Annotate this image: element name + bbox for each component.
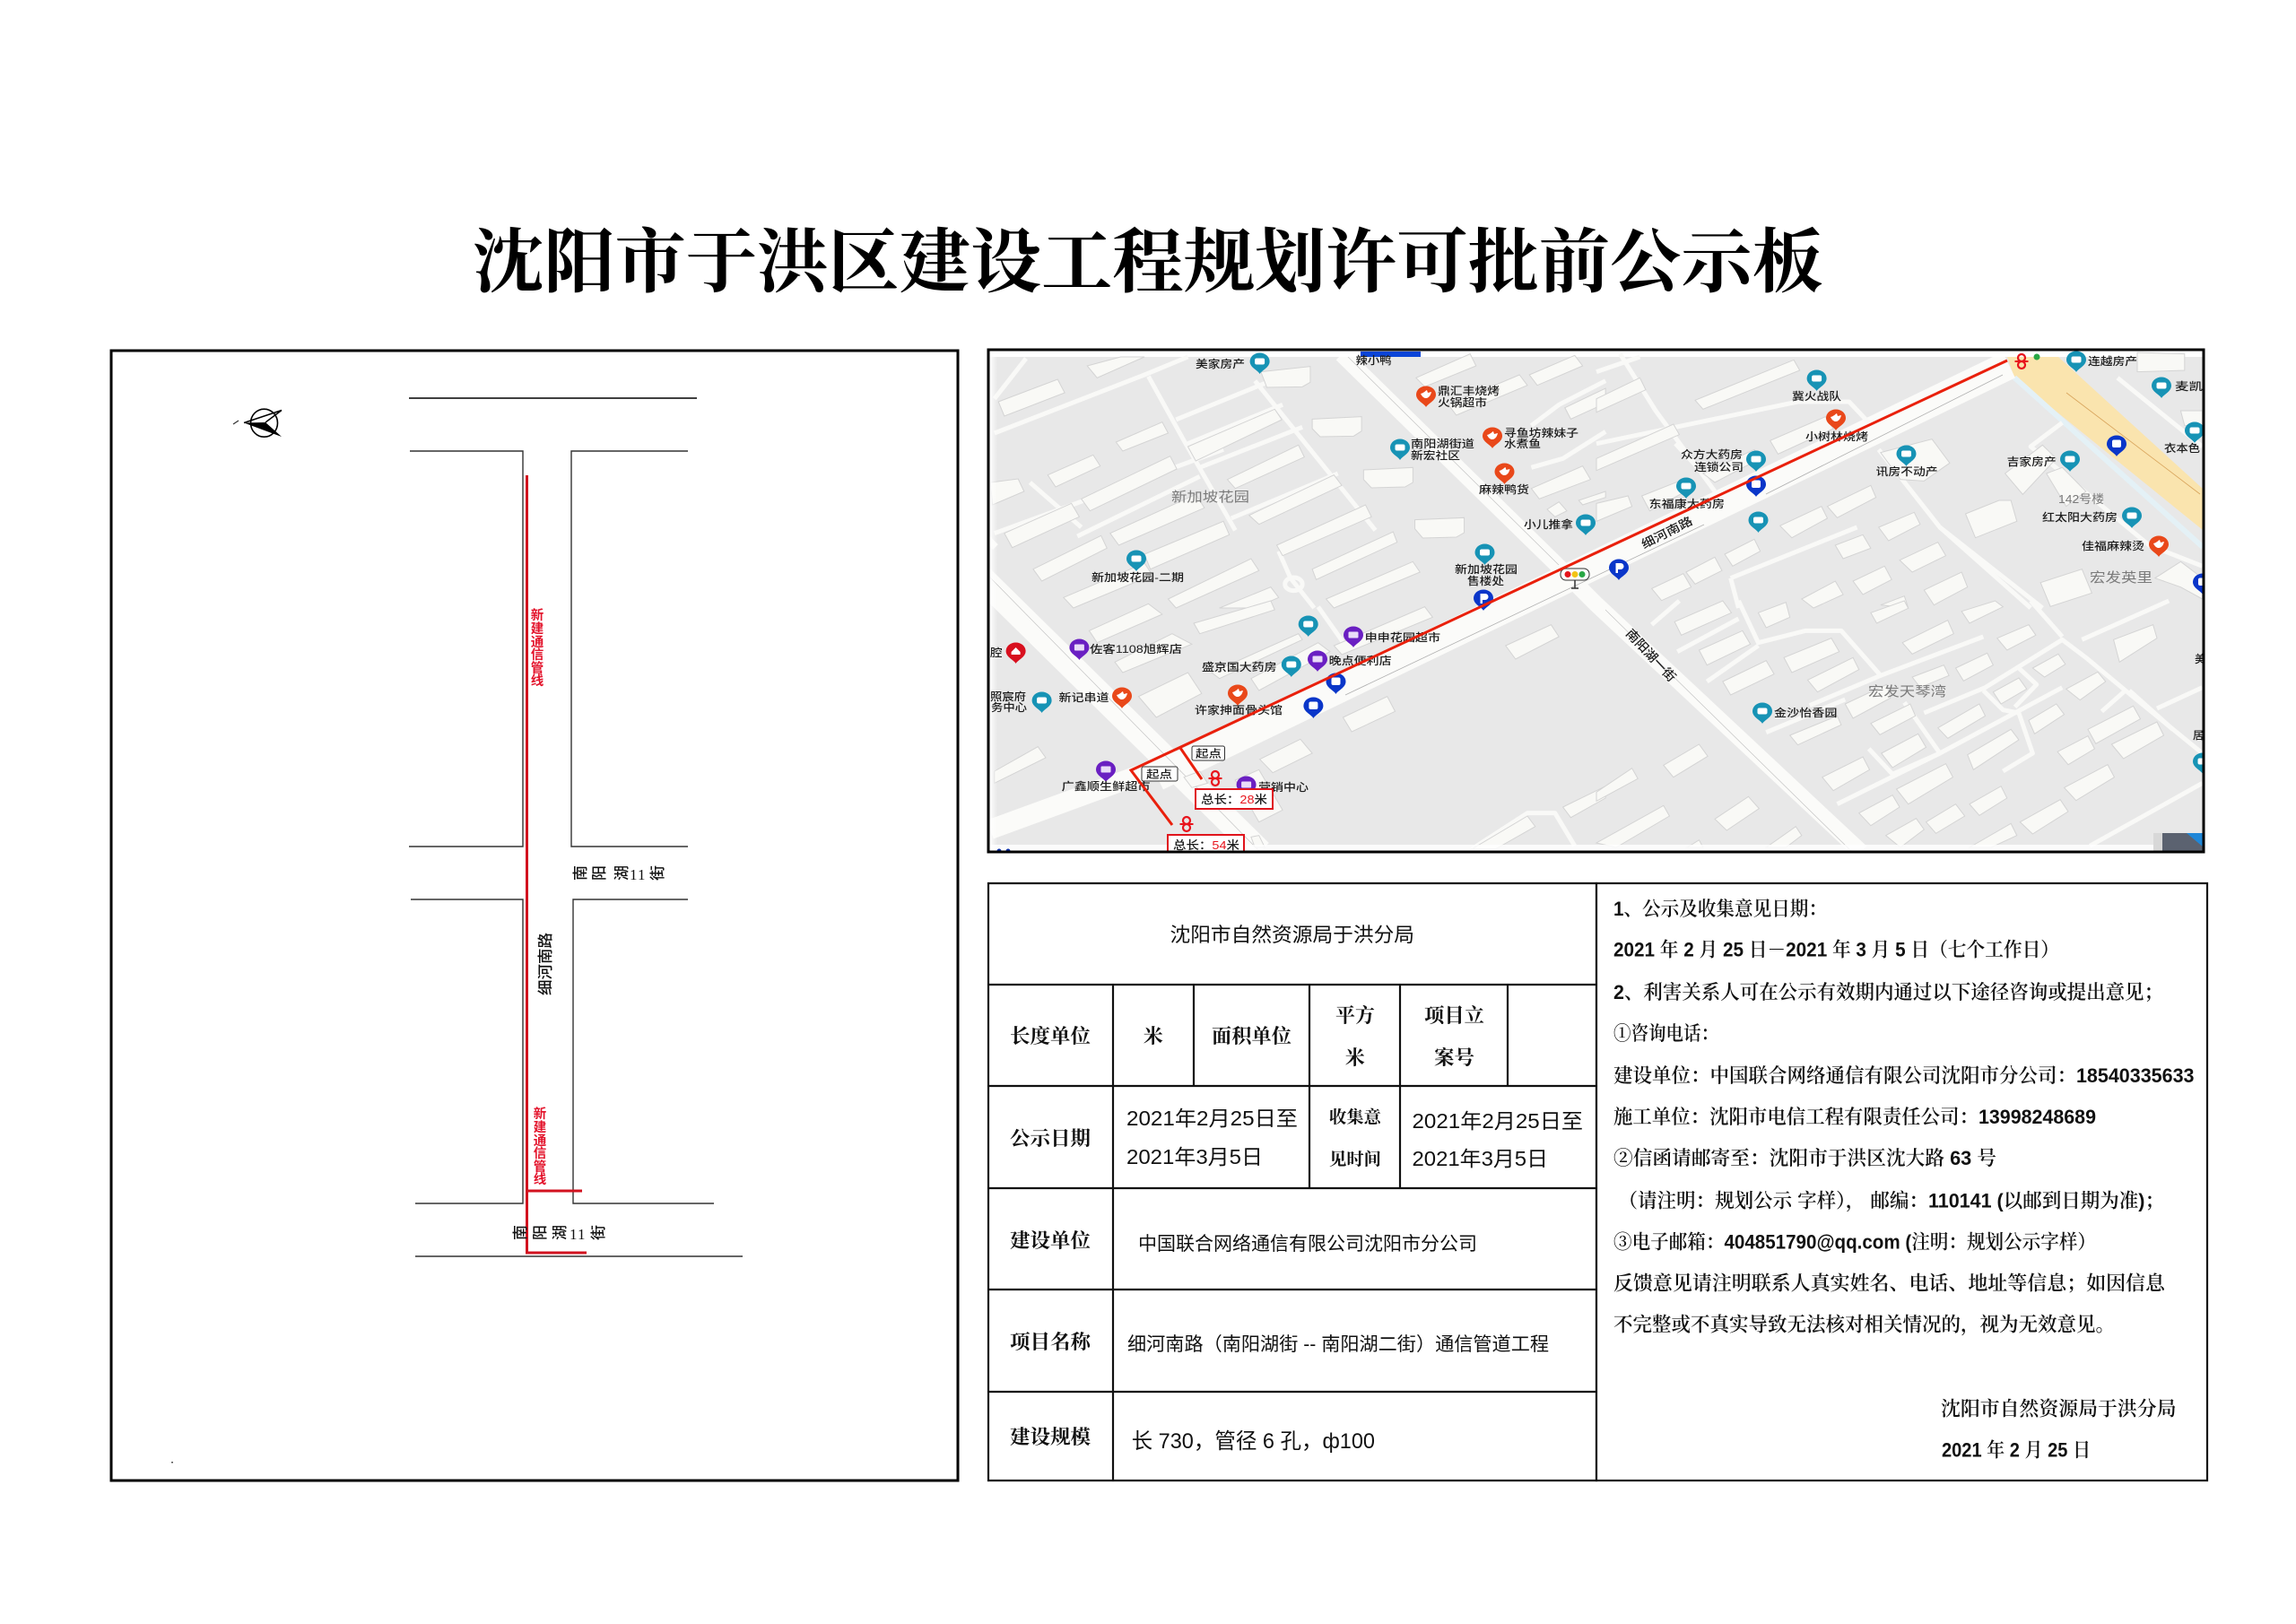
icon: parking pins [1474, 560, 1629, 611]
street label: 南阳湖11街 lower: 1 [578, 1226, 585, 1243]
feedback period label [1329, 1107, 1382, 1169]
POI: 麻辣鸭货 [1479, 463, 1529, 496]
POI: 金沙怡香园 [1752, 703, 1837, 724]
SE quadrant blocks [1596, 601, 2203, 847]
blue top bar [1361, 352, 1421, 357]
POI: 冀火战队 [1792, 369, 1841, 403]
POI: 新记串道 [1058, 687, 1132, 708]
panel: info table [988, 883, 1596, 1481]
area labels: 142号楼 [2058, 492, 2104, 506]
route end marker top [2014, 353, 2039, 369]
POI: 众方大药房连锁公司: 众方大药房 [1681, 447, 1743, 461]
POI: 盛京国大药房: 盛京国大药房 [1202, 660, 1277, 673]
street label: 南阳湖11街 upper: 街 [649, 865, 666, 881]
satellite thumbnail [2153, 833, 2204, 851]
route end markers bottom [1180, 771, 1222, 831]
POI: 许家抻面骨头馆 [1195, 685, 1283, 716]
start label box 2: 起点 [1146, 768, 1172, 780]
street label: 南阳湖11街 lower: 湖 [552, 1225, 569, 1240]
signature: 沈阳市自然资源局于洪分局 [1941, 1397, 2176, 1420]
area labels: 新加坡花园 [1171, 490, 1249, 505]
area labels [1171, 490, 2152, 699]
POI: 美家房产 [1196, 353, 1270, 374]
panel: location map [978, 350, 2213, 855]
table heading: 沈阳市自然资源局于洪分局 [1170, 924, 1414, 946]
street label: 南阳湖11街 lower: 阳 [532, 1225, 549, 1240]
POI: 鼎汇丰烧烤火锅超市: 鼎汇丰烧烤 [1438, 384, 1500, 397]
publicity dates [1126, 1107, 1298, 1168]
project scale: 长 730，管径 6 孔，ф100 [1132, 1429, 1375, 1454]
notice dates: 2021 年 2 月 25 日－2021 年 3 月 5 日（七个工作日） [1613, 938, 2059, 961]
POI: 照宸府务中心: 照宸府 [990, 690, 1026, 703]
POI: 小儿推拿 [1524, 515, 1596, 535]
start label box 1: 起点 [1196, 746, 1222, 760]
icon: traffic light [1561, 569, 1589, 588]
panel: notice text [1596, 883, 2207, 1481]
clipped edge labels: 美 [2195, 652, 2205, 665]
POI: 连越房产 [2066, 352, 2137, 372]
pipeline label lower: 新建通信管线 [534, 1106, 547, 1187]
row labels: 建设规模 [1010, 1426, 1091, 1448]
panel: site plan [111, 351, 958, 1481]
length callout 54m [1168, 835, 1244, 855]
street label: 南阳湖11街 upper: 1 [630, 866, 637, 883]
POI: 南阳湖街道新宏社区 [1390, 438, 1474, 461]
area labels: 宏发英里 [2090, 569, 2152, 586]
NE quadrant blocks [1596, 352, 2203, 608]
feedback dates [1412, 1109, 1583, 1170]
length callout 28m: 总长： 28米 [1201, 793, 1267, 806]
row labels [1010, 1025, 1092, 1448]
red route lines [1131, 360, 2007, 825]
row labels: 长度单位 [1010, 1025, 1091, 1047]
publicity dates: 2021年2月25日至 [1126, 1107, 1298, 1130]
contractor phone: 施工单位：沈阳市电信工程有限责任公司：13998248689 [1613, 1106, 2096, 1128]
feedback dates: 2021年3月5日 [1412, 1147, 1548, 1170]
consult phone heading: ①咨询电话： [1613, 1022, 1718, 1045]
unit cells: 米 [1144, 1025, 1163, 1047]
POI: 麦凯: 麦凯 [2175, 380, 2203, 393]
mail note: （请注明：规划公示 字样）， 邮编：110141 (以邮到日期为准)； [1618, 1189, 2164, 1212]
speck [171, 1462, 173, 1463]
pipeline label upper: 新建通信管线 [531, 607, 544, 689]
street label: 南阳湖11街 upper: 南 [572, 865, 589, 881]
POI: 连越房产: 连越房产 [2088, 354, 2137, 368]
POI: 盛京国大药房 [1202, 656, 1301, 677]
POI: 营销中心: 营销中心 [1258, 780, 1309, 794]
feedback note 2: 不完整或不真实导致无法核对相关情况的，视为无效意见。 [1613, 1313, 2115, 1336]
road outlines [409, 398, 743, 1256]
length callout 54m: 总长： 54米 [1173, 838, 1239, 852]
street label: 南阳湖11街 upper: 1 [638, 866, 646, 883]
POI: 佐客1108旭辉店: 佐客1108旭辉店 [1090, 642, 1182, 656]
POI: 晚点便利店 [1308, 651, 1392, 672]
POI: 麻辣鸭货: 麻辣鸭货 [1479, 482, 1529, 496]
POI: 佳福麻辣烫: 佳福麻辣烫 [2082, 539, 2144, 552]
POI: 广鑫顺生鲜超市 [1062, 760, 1151, 793]
POI: 腔 [990, 642, 1026, 664]
POI: 众方大药房连锁公司: 连锁公司 [1694, 460, 1744, 473]
unit cells [1144, 1004, 1484, 1069]
POI: 吉家房产: 吉家房产 [2007, 455, 2057, 468]
signature date: 2021 年 2 月 25 日 [1942, 1438, 2091, 1462]
street label: 南阳湖11街 lower: 街 [590, 1225, 607, 1240]
POI: 麦凯 [2152, 377, 2203, 398]
POI: 寻鱼坊辣妹子水煮鱼: 寻鱼坊辣妹子 [1504, 426, 1578, 439]
POI: 新加坡花园-二期 [1091, 551, 1184, 584]
start label box 2 [1142, 767, 1178, 781]
top strip [988, 351, 2204, 357]
start label box 1 [1192, 746, 1225, 760]
street label: 细河南路: 细河南路 [537, 933, 554, 995]
unit cells: 面积单位 [1212, 1025, 1292, 1047]
mail address: ②信函请邮寄至：沈阳市于洪区沈大路 63 号 [1613, 1147, 1996, 1169]
unit cells: 案号 [1434, 1046, 1474, 1069]
bottom fade [989, 845, 2153, 851]
POI: 新加坡花园售楼处 [1455, 543, 1518, 587]
POI: 佐客1108旭辉店 [1069, 638, 1182, 660]
POI: 冀火战队: 冀火战队 [1792, 389, 1841, 403]
POI: 佳福麻辣烫 [2082, 536, 2169, 557]
POI: 申申花园超市 [1344, 626, 1440, 647]
icon: north compass [233, 409, 282, 437]
POI: 讯房不动产: 讯房不动产 [1876, 465, 1938, 478]
feedback dates: 2021年2月25日至 [1412, 1109, 1583, 1133]
feedback period label: 见时间 [1329, 1150, 1381, 1169]
POI: 晚点便利店: 晚点便利店 [1329, 654, 1392, 667]
left edge fade [990, 357, 996, 845]
area labels: 宏发天琴湾 [1868, 684, 1946, 699]
POI: 鼎汇丰烧烤火锅超市 [1416, 386, 1500, 407]
POI: 吉家房产 [2007, 450, 2080, 472]
table grid [988, 883, 1596, 1481]
unit cells: 平方 [1335, 1004, 1375, 1027]
construction unit: 中国联合网络通信有限公司沈阳市分公司 [1138, 1234, 1477, 1255]
road label: 细河南路: 细河南路 [1639, 514, 1695, 551]
POI: 东福康大药房: 东福康大药房 [1648, 497, 1725, 510]
POI: 金沙怡香园: 金沙怡香园 [1774, 706, 1837, 719]
POI: 寻鱼坊辣妹子水煮鱼 [1483, 427, 1578, 448]
POI: 营销中心 [1237, 777, 1309, 797]
POI: 小儿推拿: 小儿推拿 [1524, 517, 1573, 531]
POI: 辣小鸭: 辣小鸭 [1356, 353, 1392, 367]
POI: 红太阳大药房: 红太阳大药房 [2042, 510, 2118, 524]
unit cells: 米 [1345, 1046, 1365, 1069]
street label: 南阳湖11街 lower [512, 1225, 607, 1243]
publicity dates: 2021年3月5日 [1126, 1145, 1263, 1168]
street label: 南阳湖11街 lower: 南 [512, 1225, 529, 1240]
row labels: 公示日期 [1010, 1127, 1091, 1150]
clipped edge labels: 居 [2193, 729, 2204, 742]
street label: 南阳湖11街 upper [572, 865, 666, 883]
POI: 申申花园超市: 申申花园超市 [1365, 630, 1440, 644]
street label: 南阳湖11街 lower: 1 [570, 1226, 578, 1243]
POI: 新加坡花园-二期: 新加坡花园-二期 [1091, 570, 1184, 584]
POI: 许家抻面骨头馆: 许家抻面骨头馆 [1195, 703, 1283, 716]
SW quadrant blocks [995, 601, 1605, 849]
POI: 照宸府务中心: 务中心 [991, 700, 1027, 714]
POI: 新记串道: 新记串道 [1058, 690, 1109, 704]
title: 沈阳市于洪区建设工程规划许可批前公示板 [473, 223, 1823, 301]
NW quadrant blocks [990, 354, 1605, 608]
construction unit phone: 建设单位：中国联合网络通信有限公司沈阳市分公司：18540335633 [1613, 1064, 2194, 1087]
yellow arterial road [2007, 357, 2203, 547]
feedback note 1: 反馈意见请注明联系人真实姓名、电话、地址等信息；如因信息 [1613, 1272, 2166, 1295]
POI: 衣本色: 衣本色 [2164, 441, 2200, 455]
POI: 南阳湖街道新宏社区: 新宏社区 [1411, 448, 1460, 462]
email: ③电子邮箱：404851790@qq.com (注明：规划公示字样） [1613, 1230, 2096, 1254]
icon: bus and door pins [1299, 436, 2213, 774]
POI: 鼎汇丰烧烤火锅超市: 火锅超市 [1438, 395, 1487, 409]
POI: 讯房不动产 [1876, 445, 1938, 478]
POI: 南阳湖街道新宏社区: 南阳湖街道 [1411, 437, 1474, 450]
row labels: 建设单位 [1010, 1229, 1091, 1252]
blue dots [997, 848, 1010, 854]
POI: 衣本色 [2165, 421, 2203, 454]
length callout 28m [1196, 789, 1273, 809]
street label: 南阳湖11街 upper: 湖 [613, 865, 631, 881]
clipped edge labels [2193, 652, 2205, 742]
POI: 美家房产: 美家房产 [1196, 357, 1245, 370]
POI: 照宸府务中心 [990, 690, 1052, 714]
POI: 小树林烧烤 [1805, 409, 1868, 443]
new pipeline route [527, 475, 587, 1253]
street label: 南阳湖11街 upper: 阳 [591, 865, 608, 881]
POI: 新加坡花园售楼处: 新加坡花园 [1455, 562, 1518, 576]
POI: 寻鱼坊辣妹子水煮鱼: 水煮鱼 [1504, 437, 1541, 450]
unit cells: 项目立 [1424, 1004, 1484, 1027]
POI: 红太阳大药房 [2042, 508, 2142, 528]
POI: 东福康大药房 [1648, 477, 1725, 510]
POI: 众方大药房连锁公司 [1681, 448, 1766, 472]
POI: 新加坡花园售楼处: 售楼处 [1467, 574, 1504, 587]
notice line 1: 1、公示及收集意见日期： [1613, 898, 1827, 920]
row labels: 项目名称 [1010, 1331, 1092, 1353]
project name: 细河南路（南阳湖街 -- 南阳湖二街）通信管道工程 [1127, 1334, 1549, 1355]
notice line 2: 2、利害关系人可在公示有效期内通过以下途径咨询或提出意见； [1613, 981, 2163, 1003]
POI: 小树林烧烤: 小树林烧烤 [1805, 430, 1868, 443]
road label: 南阳湖一街: 南阳湖一街 [1623, 626, 1679, 684]
POI: 广鑫顺生鲜超市: 广鑫顺生鲜超市 [1062, 779, 1151, 793]
main roads [978, 354, 2009, 852]
feedback period label: 收集意 [1329, 1107, 1382, 1127]
POI: 腔: 腔 [990, 647, 1003, 659]
